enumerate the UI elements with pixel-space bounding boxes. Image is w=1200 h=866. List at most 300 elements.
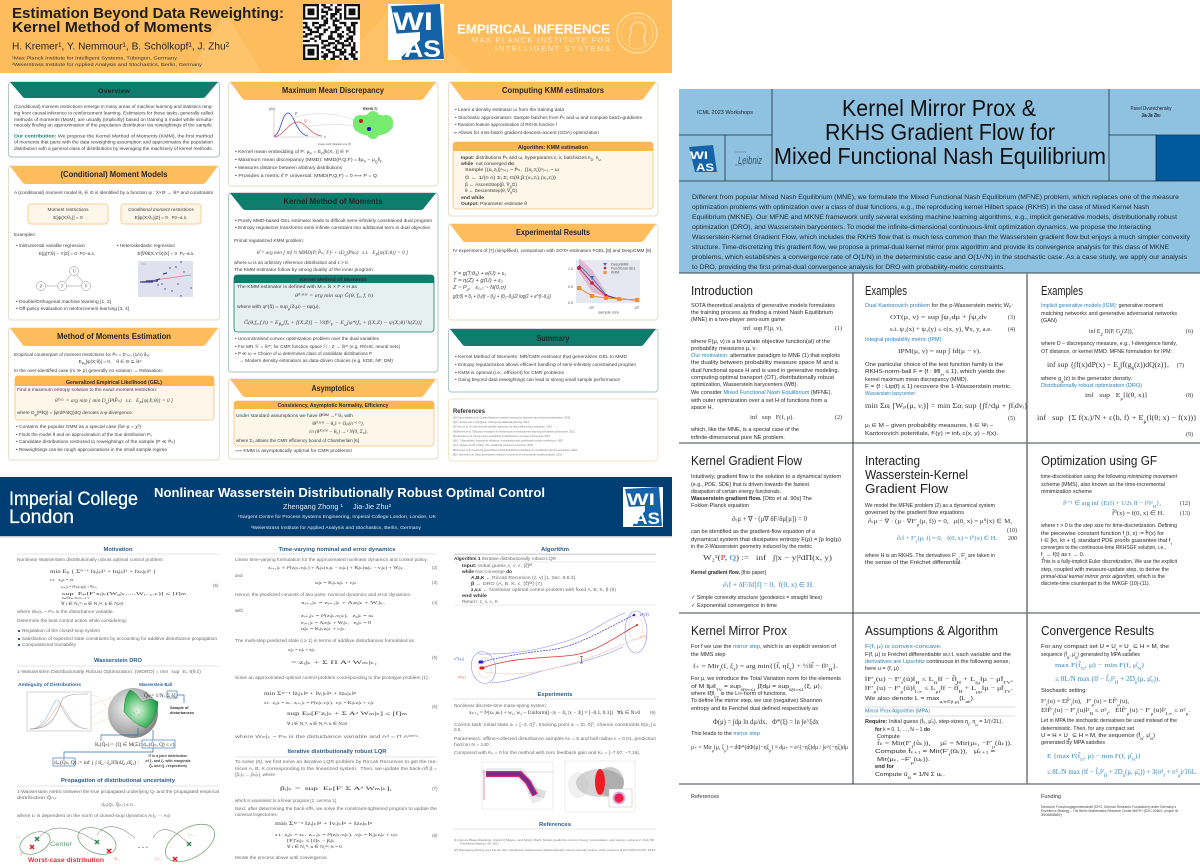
text and equations: (GAN) (1041, 318, 1057, 324)
chart: distributions to RKHS: P (294, 112, 298, 116)
heading: Method of Moments Estimation (57, 331, 171, 341)
bullet list: • Reweightings can be rough approximations in the small sample regime (16, 447, 167, 452)
text and equations: xᵢ₊₁|ₖ = zᵢ₊₁|ₖ + Aᵢeᵢ|ₖ + Wᵢ|ₖ, (301, 600, 385, 606)
callout: GEL (15, 376, 214, 420)
heading (865, 453, 968, 496)
text and equations: discrete-time counterpart to the IWKGF (10)-(11). (1041, 581, 1150, 587)
callout: GEL: θ̂ᴳᴱᴸ = arg min [ min Dφ(P‖P̂ₙ) s.t. EP[ψ(X;θ)] = 0 ] (55, 397, 173, 405)
text and equations: Next, after determining the back-offs, we solve the constraint-tightened program to update the (235, 806, 438, 811)
text block: Empirical counterpart of moment restrictions for P̂ₙ = Σⁿᵢ₌₁ (1/n) δₓᵢ: (14, 351, 150, 357)
bullet list: • Kernel Method of Moments: MR/CMR estimator that generalizes GEL to MMD (455, 354, 628, 359)
equation: Wasserstein ball and distance: Q̂ₙ and Q, respectively (149, 763, 187, 768)
callout: algorithm: Algorithm: KMM estimation (518, 145, 588, 151)
panel: overview (8, 82, 220, 157)
text block: with outer optimization over a set H of functions from a (690, 398, 828, 404)
text and equations: (2) (432, 565, 438, 570)
text and equations: with (235, 608, 243, 613)
conclusion: ⟹ KMM is asymptotically optimal for CMR problems! (235, 448, 352, 453)
text and equations: We also denote L = max a,b∈{f,μ} {L ab}. (865, 696, 976, 704)
text and equations (691, 474, 841, 609)
section: references (454, 822, 656, 852)
heading: Computing KMM estimators (502, 85, 604, 95)
text and equations: where gθ(z) is the generator density. (1040, 376, 1132, 384)
heading: Optimization using GF (1041, 453, 1157, 468)
text and equations: where H is an RKHS. The derivatives F′μ, F′f are taken in (864, 553, 995, 560)
diagram: trajectory tube: z(T) (639, 634, 647, 639)
text and equations: μ₊ = Mirμ(μ, ξμ) = dΦ*(dΦ(μ)−ηξμ) ≡ dμ₊ = e^(−ηξ)dμ / ∫e^(−ηξ)dμ (691, 744, 849, 752)
text and equations: (6) (432, 704, 438, 709)
text and equations: This is a fully-implicit Euler discretization. We use the explicit (1041, 559, 1177, 565)
icon: Leibniz logo: Leibniz (738, 155, 762, 167)
text and equations: f̂⁰(x) = f(0, x) ∈ H. (1111, 509, 1164, 517)
algorithm listing: A,B,K ← Riccati Recursion (z, v) [1, Sec. 8.8.3] (471, 575, 575, 580)
algorithm listing: for k = 0, 1, …, N − 1 do (875, 727, 931, 733)
section: motivation (17, 547, 219, 647)
diagram: uncertainty ellipses (16, 817, 221, 866)
text block: space H. (691, 405, 714, 411)
icon: WIAS logo (689, 145, 717, 174)
text and equations: ∂ₜμ + ∇ · (μ∇ δF/δμ[μ]) = 0 (732, 515, 807, 523)
text and equations: ∂ₜμ − ∇ · (μ · ∇F′ μ(μ, f)) = 0, μ(0, x) = μ⁰(x) ∈ M, (868, 518, 1012, 526)
text and equations: ∀ i ∈ N₁ᴺ, n ∈ N₁ⁿˣ, k = 0. (287, 844, 343, 850)
text block: neously finding an approximation of the population distribution via reweightings of the sample. (14, 123, 213, 128)
equation: empirical distribution with callout: Q̂ₙ = 1/Nₛ Σ δξᵢ (144, 692, 177, 699)
callout: consistency: where Σ₀ attains the CMR efficiency bound of Chamberlain [6] (236, 438, 359, 443)
icon: QR code (303, 4, 360, 60)
equation 1: xᵢ₊₁|ₖ = fᵈ(xᵢ|ₖ,uᵢ|ₖ) + Wₖ₊ᵢ (61, 584, 97, 590)
text and equations: (6) (1186, 328, 1193, 335)
algorithm listing: f̃ₖ = Mir(F′ f(ûₖ)), μ̃ₖ = Mir(μₖ, −F′ μ(ûₖ)). (877, 738, 1013, 748)
panel: introduction (690, 283, 842, 441)
text and equations (235, 557, 438, 739)
text and equation: 0.5. (454, 727, 462, 732)
abstract: Wasserstein-Kernel Gradient Flow, which includes the RKHS flow that is much less common than the Wasserstein gradient flow but enjoys a much simpler convexity (692, 234, 1191, 241)
text and equations (865, 644, 1014, 704)
header panel (679, 89, 1200, 273)
algorithm listing: Return: z, v, c, K (462, 599, 498, 604)
text and equations: μᵢ ∈ M – given probability measures, fᵢ ∈ Ψᵢ – (865, 422, 994, 429)
title: Kernel Mirror Prox & (842, 95, 1036, 121)
line chart: estimator error vs sample size: Functional GEL (611, 266, 636, 270)
text and equations: For f we use the mirror step, which is an explicit version of (691, 644, 836, 650)
logo: Imperial College London (9, 489, 138, 528)
diagram: trajectory tube: x*(x₀) (453, 656, 465, 661)
bullet list (455, 354, 636, 382)
bullet list: Computational tractability (22, 642, 77, 647)
text and equations (1037, 303, 1197, 438)
text and equations: zᵢ₊₁|ₖ = fᵈ(zᵢ|ₖ,vᵢ|ₖ), z₀|ₖ = xₖ (301, 613, 374, 619)
callout: GEL: Generalized Empirical Likelihood (GEL) (66, 380, 162, 386)
bullet list (235, 336, 400, 363)
text and equations: min Σαᵢ [Wₚ(μ, νᵢ)] = min Σαᵢ sup {∫fᵢᶜdμ + ∫fᵢdνᵢ} (865, 402, 1028, 410)
bullet list: • Contains the popular GMM as a special case (for φ = χ²) (16, 424, 141, 429)
bullet list (453, 107, 643, 135)
equation 1: min Eₚ { Σᴺ⁻¹ ‖xᵢ|ₖ‖² + ‖uᵢ|ₖ‖² + ‖xₙ|ₖ‖² } (50, 569, 157, 575)
chart: state-space trajectories (565, 761, 635, 812)
panel: references (448, 399, 658, 461)
section: iterative distributionally robust LQR (235, 749, 438, 860)
text and equations: the MMS step (691, 652, 726, 658)
chart: causal graph (36, 266, 90, 290)
logo text: empirical inference: INTELLIGENT SYSTEMS (495, 44, 610, 53)
chart: regression scatter (138, 261, 193, 297)
reference list (454, 838, 656, 852)
text and equations (865, 303, 1028, 437)
text and equations: t ∈ [kτ, kτ + τ], standard PDE proofs guarantee that fτ (1041, 537, 1172, 546)
text and equation: Nonlinear discrete-time mass-spring system: (454, 703, 547, 708)
equation: Wasserstein ball and distance (53, 728, 191, 768)
abstract: structure. Time-discretizing this gradient flow, we propose a primal-dual kernel mirror prox algorithm and provide its convergence analysis for this class of MKNE (692, 244, 1170, 251)
poster 2: nonlinear Wasserstein DRO control (0, 477, 672, 866)
reference list: [6] G. Chamberlain. Asymptotic efficiency in estimation with conditional moment restrictions. 1987 (453, 439, 563, 443)
heading: Introduction (691, 283, 753, 298)
text and equations: which is equivalent to a linear program [2, Lemma 1]. (235, 798, 337, 803)
text and equations: dynamical system that dissipates entropy F(ρ) = ∫ρ log(ρ) (691, 537, 841, 543)
chart: distributions to RKHS: RKHS ℋ (363, 106, 378, 111)
text and equations: Intuitively, gradient flow is the solution to a dynamical system (691, 474, 841, 480)
equation: Wasserstein ball and distance: of ξ₁ and ξ₂ with marginals (145, 759, 191, 763)
panel: computing KMM estimators (448, 82, 658, 216)
text block: where F(μ, ν) is a bi-variate objective function(al) of the (690, 339, 830, 345)
text and equations: generated by MPA satisfies (1041, 740, 1105, 746)
text and equations: (9) (1186, 431, 1193, 438)
text and equations: Kernel gradient flow. [this paper] (691, 570, 766, 576)
text and equations: inf sup {∫f(x)dP(x) − E z∫f(gθ(z))dQ(z)}, (1047, 361, 1169, 372)
callout: KMM definition: Ĝ(θ,f₀,f,h) = E P̂n[f₀ + f(X,Z)] − ½‖f‖² F − Eω[φ*(f₀ + f(X,Z) − ψ(X;θ)ᵀh(Z))] (244, 318, 422, 327)
text block: Our motivation: alternative paradigm to MNE (1) that exploits (691, 353, 840, 359)
diagram: uncertainty ellipses: Qₜ₊₁ (155, 857, 163, 861)
text and equation: xₖ₊₁ = fᵈ(xₖ,uₖ) + w₁, w₂ ~ Uniform([−|x − 3|, |x − 3|] × [−0.1, 0.1]) ∀k ∈ N≥0 (469, 710, 641, 716)
panel: maximum mean discrepancy (228, 82, 438, 186)
abstract: problems, which establishes a convergence rate of O(1/N) in the deterministic case and O(1/√N) in the stochastic case. As a case study, we apply our analysis (692, 253, 1188, 261)
text and equations: ≤ 8L/N max (‖f − f̂₀‖²H + 2Dh(μ, μ̂₀)) + 3(σ²f + σ²μ)/16L. (1047, 768, 1197, 778)
sub headings: Ambiguity of Distributions (18, 682, 81, 688)
text and equations: inf sup {Σ f(xᵢ)/N + ε⟨h, f⟩ + E μ(l(θ; x) − f(x))} (1037, 414, 1197, 424)
algorithm listing: while Not Converge do (461, 569, 512, 574)
text and equations: the sense of the Fréchet differential. (865, 560, 962, 566)
callout: KMM definition (234, 275, 434, 332)
text and equations: in the 2-Wasserstein geometry induced by the metric (691, 544, 812, 550)
panel: interacting Wasserstein-Kernel gradient flow (864, 453, 1017, 566)
text and equations: (3) (432, 580, 438, 585)
text and equations: Φ(μ) = ∫dμ ln dμ/dx, Φ*(ξ) = ln ∫e^ξdx (713, 718, 819, 726)
text and equations: ∀ i ∈ N₁ᴺ, n ∈ N₁ⁿˣ, k ∈ N≥0 (287, 721, 348, 727)
text and equations: nominal trajectories: (235, 812, 278, 817)
text and equations: trices A, B, K corresponding to the linearized system. Then, we update the back-off β = (235, 766, 437, 771)
equation: Wasserstein ball and distance: Bₑ(Q̂ₙ) = {Q ∈ M(Ξ): dᵥᵥ(Q̂ₙ, Q) ≤ ε} (95, 742, 175, 748)
text and equations: ✓ Exponential convergence in time (691, 603, 777, 609)
text and equations: This leads to the mirror step (691, 731, 760, 737)
text and equations: Distributionally robust optimization (DRO) (1041, 383, 1142, 389)
text block: inf sup F(f, μ). (750, 414, 794, 421)
affiliations: ²Weierstrass Institute for Applied Analysis and Stochastics, Berlin, Germany (12, 62, 203, 67)
title: Kernel Method of Moments (12, 20, 212, 36)
text block: inf sup F(μ, ν), (743, 325, 783, 332)
text block: the duality between probability measure space M and a (691, 360, 839, 366)
panel: conditional moment models (8, 166, 220, 320)
diagram: uncertainty ellipses: ... (138, 843, 150, 850)
panel: kernel mirror prox (690, 623, 849, 752)
text and equations: min Σᴺ⁻¹ ‖zᵢ|ₖ‖² + ‖vᵢ|ₖ‖² + ‖zₙ|ₖ‖² (275, 821, 373, 827)
callout: consistency: ‖θ̂ᴷᴹᴹ − θ₀‖ = Oₚ(n⁻¹ᐟ²), (312, 420, 364, 427)
text and equations: F(f, μ) is Fréchet differentiable w.r.t. each variable and the (865, 652, 1011, 658)
text block: We consider Mixed Functional Nash Equilibrium (MFNE), (691, 390, 832, 396)
bullet list: • For MR ℋ = ℝᵐ; for CMR function space ℋ : Z → ℝᵐ (e.g. RKHS, neural nets) (235, 344, 400, 349)
text and equation: Compared with Kₖ = 0 for the method with zero feedback gain and Kₖ = [−7.97, −7.16]. (454, 750, 640, 755)
text and equations: To solve (6), we first solve an iterative LQR problem by Riccati Recursion to get the ma- (235, 759, 438, 764)
equations: T = η(Z) + g(U) + ε₂ (453, 278, 503, 284)
diagram: uncertainty ellipses: Worst-case distribution (28, 857, 104, 864)
text block: E P̂n[ψ(X;θ)] = 0, θ ∈ Θ ⊆ ℝᵖ (79, 359, 142, 366)
text and equations: = zᵢ|ₖ + Σ Π Aᵈ Wₘ|ₖ, (291, 660, 377, 666)
text block: Nonlinear Wasserstein distributionally robust optimal control problem: (17, 557, 164, 562)
text block: distribution with a general class of distributions by leveraging the machinery of kernel methods. (14, 146, 213, 151)
algorithm listing: β ← DRO (A, B, K, ε, {ξ̂}ᴹ) (7) (471, 581, 543, 586)
text and equations: One particular choice of the test function family is the (865, 362, 1003, 368)
text and equations: Stochastic setting: (1041, 688, 1087, 694)
callout: moment restrictions (28, 204, 108, 224)
abstract: Different from popular Mixed Nash Equilibrium (MNE), we formulate the Mixed Functional Nash Equilibrium (MFNE) problem, which replaces one of the measure (692, 194, 1179, 201)
panel: experimental results (448, 224, 658, 320)
chart: distributions to RKHS (268, 106, 393, 146)
text and equations: IPM(μ, ν) = sup ∫ fd(μ − ν). (898, 348, 981, 355)
reference list: [8] Kremer et al. Functional generalized empirical likelihood estimation for conditional moment restrictions. 2022 (453, 448, 577, 452)
text and equations: scheme (MMS), also known as the time-incremental (1041, 482, 1165, 488)
authors and affiliations: Zhengang Zhong ¹ Jia-Jie Zhu² (283, 502, 391, 511)
panel: kernel gradient flow (691, 453, 841, 609)
text and equations: matching networks and generative adversarial networks (1041, 311, 1177, 317)
heading: Asymptotics (312, 383, 355, 393)
text and equations: W₂²( P, Q) := inf ∫|x − y|²dΠ(x, y) (703, 554, 833, 562)
chart: causal graph: T (61, 284, 64, 288)
text and equations: dissipation of certain energy functionals. (691, 489, 781, 495)
chart: ambiguity distributions (27, 692, 122, 731)
title: Estimation Beyond Data Reweighting: (12, 6, 284, 22)
footer: references heading: References (691, 794, 719, 800)
callout: algorithm: end while (461, 195, 484, 200)
text and equations: of M ‖μ‖ TV = sup ‖ξ‖∞≤1 ∫ξdμ = sup ‖ξ‖∞≤1 ⟨ξ, μ⟩, (691, 683, 823, 692)
text and equations: can be identified as the gradient-flow equation of a (691, 529, 816, 535)
text and equations: (13) (1180, 510, 1190, 517)
icon: WIAS logo: WI (393, 8, 433, 36)
poster 1: kernel method of moments (0, 0, 672, 461)
line chart: estimator error vs sample size (568, 258, 640, 314)
text and equation: (9) (650, 710, 656, 715)
text and equations: ✓ Simple convexity structure (geodesics = straight lines) (691, 595, 822, 601)
heading: Kernel Mirror Prox (691, 623, 787, 638)
authors: Jia-Jie Zhu (1142, 113, 1160, 119)
text block (690, 303, 842, 441)
text block: In the over-identified case (m ≫ p) generally no solution → Relaxation: (14, 368, 163, 373)
heading: Assumptions & Algorithm (865, 623, 998, 638)
algorithm listing: end while (462, 593, 488, 598)
text block: probability measures μ, ν. (691, 346, 757, 352)
text and equations: where D – discrepancy measure, e.g., f-divergence family, (1040, 341, 1177, 347)
text and equations: converges to the continuous-time RKHSGF solution, i.e., (1041, 545, 1166, 551)
text and equations: (5) (432, 655, 438, 660)
text block: IV experiment of [7] (simplified), comparison with SOTA estimators FGEL [8] and DeepGMM [9] (453, 248, 651, 253)
bullet list: • Candidate distributions restricted to reweightings of the sample (P ≪ P̂ₙ) (16, 438, 175, 444)
text and equations: fτ → f(t) as τ → 0. (1041, 552, 1085, 560)
title: RKHS Gradient Flow for (825, 119, 1055, 145)
text block: distribution Q̂ₙ,ₜ (17, 794, 58, 800)
authors and affiliations: ²Weierstrass Institute for Applied Analysis and Stochastics, Berlin, Germany (251, 525, 422, 530)
text and equations: (5) (1008, 415, 1015, 422)
bullet list: • Random feature approximation of RKHS function f (455, 122, 558, 127)
line chart: estimator error vs sample size: 0.5 (568, 285, 573, 289)
algorithm listing: Require: Initial guess (f̂₀, μ̂₀), step-sizes ηf, ημ = 1/(√2L). (865, 718, 1003, 726)
text and equations (690, 644, 849, 752)
text block: which, like the MNE, is a special case of the (690, 427, 799, 433)
logo text: empirical inference (457, 22, 611, 53)
text and equations: Integral probability metric (IPM): (865, 337, 943, 343)
text and equations: primal-dual kernel mirror prox algorithm, which is the (1040, 574, 1165, 580)
text and equations: βᵢ|ₖ = sup Eₚ[F′ Σ Aᵈ Wₘ|ₖ], (280, 786, 392, 792)
diagram: uncertainty ellipses: Center (50, 841, 73, 848)
line chart: estimator error vs sample size: 0.0 (568, 301, 573, 305)
bullet list (16, 424, 175, 452)
text and equations: uᵢ|ₖ = Kᵢ|ₖxᵢ|ₖ + cᵢ|ₖ. (315, 580, 358, 585)
bullet list: • Double/Orthogonal machine learning [1, 2] (16, 299, 111, 304)
text block: where εₜ is dependent on the norm of closed-loop dynamics Aₜ|₀ ··· Aₜ|ₜ (17, 813, 172, 818)
text and equations: F(f, μ) is convex-concave. (865, 644, 943, 650)
reference list: [2] D. Foster and V. Syrgkanis. Orthogonal statistical learning. 2019 (453, 420, 529, 424)
icon: WIAS logo: AS (634, 509, 660, 528)
text block (17, 609, 127, 623)
text and equations: step, coupled with measure-update step, to derive the (1041, 567, 1169, 573)
text block: • Purely MMD-based GEL estimator leads to difficult semi-infinitely constrained dual program (235, 218, 432, 223)
bullet list: Satisfaction of expected state constraints by accounting for additive disturbance propagation (22, 636, 218, 641)
text block: The KMM estimator follow by strong duality of the inner program: (234, 267, 374, 272)
text and equations: E {max F(f̂ N, μ) − min F(f, μ̂ N)} (1047, 752, 1141, 762)
heading: Examples (1041, 283, 1083, 298)
footer: funding: Funding (1041, 794, 1061, 800)
diagram: uncertainty ellipses: Qₙ,ₜ₊₁ (188, 833, 198, 838)
panel: kernel method of moments (228, 193, 438, 372)
equations: g(t;θ) = θ₁ + θ₂t(t − θ₁) + (θ₁−θ₂)/2 log(1 + e^(t−θ₂)) (453, 294, 551, 300)
diagram: uncertainty ellipses: Qₙ,₁ (16, 835, 23, 840)
reference list: [4] Bennett et al. Off-policy evaluation in infinite-horizon reinforcement learning with latent confounders. 2021 (453, 429, 575, 433)
text and equations: Let in MPA the stochastic derivatives be used instead of the (1041, 718, 1177, 724)
text and equations: ∂ₜf + δF/δf[f] = 0, f(0, x) ∈ H. (723, 581, 814, 589)
heading: Convergence Results (1041, 623, 1154, 638)
text and equations: For any compact set U = U f × U μ ⊆ H × M, the (1041, 644, 1169, 652)
text and equations: Solve an approximated optimal control problem corresponding to the prototype problem (1): (235, 675, 429, 680)
authors (1130, 106, 1172, 119)
text block: infinite-dimensional pure NE problem. (691, 435, 785, 441)
text and equations: Fokker-Planck equation (691, 503, 749, 509)
callout: algorithm: Sample {(xᵢ,zᵢ)}ⁿᵢ₌₁ ~ P̂ₙ, {(xⱼ,zⱼ)}ⁿⱼ₌₁ ~ ω (465, 166, 559, 172)
title (12, 6, 284, 36)
equation 1: ∀ i ∈ N₁ᴺ, n ∈ N₁ⁿˣ, k ∈ N≥0 (61, 601, 124, 607)
callout: algorithm: Input: distributions P̂ₙ and ω, hyperparams ε, λ, batchsizes n D, n ω (461, 154, 601, 162)
title (774, 95, 1106, 169)
text and equations: entropy and its Fenchel dual defined respectively as (691, 706, 818, 712)
heading: Interacting (865, 453, 920, 468)
bullet list (18, 628, 218, 647)
algorithm listing: Input: Initial guess z, v, ε, {ξ̂}ᴹ (462, 563, 533, 568)
text and equations: (4) (432, 600, 438, 605)
panel: assumptions and algorithm (865, 623, 1015, 780)
callout: GEL: Find a maximum entropy solution to the exact moment restriction: (17, 387, 157, 392)
reference list: [9] A. Bennett et al. Deep generalized method of moments for instrumental variable analysis. 2019 (453, 452, 562, 456)
text and equations: and (235, 573, 243, 578)
chart: closed-loop trajectories (482, 762, 553, 809)
bullet list (16, 299, 129, 311)
text and equations (235, 759, 438, 860)
callout: consistency: Under standard assumptions we have θ̂ᴷᴹᴹ →ᴾ θ₀ with (236, 413, 353, 418)
text and equations: time-discretization using the following minimizing movement (1041, 474, 1177, 480)
algorithm listing: Compute (877, 734, 900, 740)
text and equations: ‖F′ μ(u) − F′ μ(ũ)‖ L∞ ≤ L μf‖f − f̃‖ H + L μμ‖μ − μ̃‖ TV . (865, 683, 1014, 694)
chart: causal graph: Z (40, 284, 43, 288)
title: Nonlinear Wasserstein Distributionally Robust Optimal Control (154, 485, 545, 500)
text and equations: here u = (f, μ) (865, 666, 899, 672)
text block: 1-Wasserstein Distributionally Robust Optimization: (WDRO) = min sup Eₚ ℓ(θ,ξ) (17, 669, 202, 674)
text and equations: where Wₘ|ₖ ~ Pₘ is the disturbance variable and Aᵈ = Π Aᵈᵐⁱⁿ. (235, 733, 420, 739)
chart: causal graph: U (73, 268, 77, 274)
text and equations (1040, 474, 1190, 587)
text block: where ω is an arbitrary reference distribution and ε > 0. (234, 260, 349, 265)
line chart: estimator error vs sample size: sample size (598, 310, 620, 314)
heading: Experimental Results (516, 227, 590, 237)
text and equations: deterministic. Then, for any compact set (1041, 726, 1134, 732)
heading: (Conditional) Moment Models (60, 169, 168, 179)
line chart: estimator error vs sample size: KMM (611, 270, 619, 274)
algorithm listing: Algorithm 1 Iterative distributionally robust LQR (454, 556, 557, 561)
text and equations: U = H × U μ ⊆ H × M, the sequence (f̂ N, μ̂N) (1041, 732, 1155, 740)
text and equations: (10) (1007, 527, 1017, 534)
diagram: uncertainty ellipses: M₁,₁ (113, 857, 121, 862)
text and equations: We model the MFNE problem (2) as a dynamical system (865, 503, 995, 509)
authors and affiliations: ¹Sargent Centre for Process Systems Engineering, Imperial College London, London, UK (238, 514, 436, 519)
text and equations: governed by the gradient flow equations (865, 510, 964, 516)
algorithm listing: end for (875, 764, 895, 770)
diagram: trajectory tube: z*(T) (639, 612, 649, 617)
callout: KMM definition: θ̂ᴷᴹᴹ = arg min sup Ĝ(θ, f₀, f, h) (295, 291, 373, 299)
callout: algorithm: θ ← DescentStep(θ, ∇ θĜ) (465, 187, 517, 195)
text block: optimization, Wasserstein barycenters (WB). (691, 382, 798, 388)
text and equations: [F]′zᵢ|ₖ ≤ [f]ₙ − βᵢ|ₖ (287, 838, 335, 843)
text block: examples: Examples: (14, 232, 36, 237)
bullet list: • Stochastic approximation: Sample batches from P̂ₙ and ω and compute batch-gradients (455, 114, 643, 120)
heading: Motivation (104, 547, 133, 553)
callout: consistency (234, 401, 434, 446)
text and equations: xᵢ|ₖ = zᵢ|ₖ + eᵢ|ₖ (288, 647, 315, 652)
text and equations: inf sup E μ[l(θ, x)] (1085, 392, 1147, 400)
text and equations: The multi-step predicted state (i ≥ 1) in terms of additive disturbances formulated as (235, 638, 415, 643)
text and equations (864, 503, 1017, 566)
equation 1: (5) (213, 583, 219, 588)
callout: consistency: √n (θ̂ᴷᴹᴹ − θ₀) →ᵈ N(0, Σ₀), (308, 428, 368, 435)
bullet list: • KMM is optimal (i.e., efficient) for CMR problems (455, 370, 565, 375)
equation: empirical distribution with callout (144, 691, 194, 715)
text and equations: (4) (1008, 326, 1015, 333)
equation 1: s.t. x₀|ₖ = xₖ (50, 577, 74, 582)
text block: (MNE) in a two-player zero-sum game (691, 317, 785, 323)
text and equations: (12) (1180, 500, 1190, 507)
icon: WIAS logo: WI (627, 490, 655, 509)
text and equations: kernel maximum mean discrepancy (MMD). (865, 377, 968, 383)
footer: funding (1041, 794, 1179, 817)
text and equations: OT(μ, ν) = sup ∫ψ₁dμ + ∫ψ₂dν (890, 314, 987, 321)
abstract: to DRO, providing the first primal-dual convergence analysis for DRO with probability-metric constraints. (692, 264, 1005, 271)
equation: Wasserstein ball and distance: Π is a joint distribution (149, 754, 187, 758)
heading: Algorithm (541, 547, 569, 553)
text and equations: eᵢ₊₁|ₖ = Aᵢeᵢ|ₖ + Wᵢ|ₖ, e₀|ₖ = 0 (301, 620, 372, 626)
panel: asymptotics (228, 379, 438, 459)
text block: Determine the best control action while considering: (17, 618, 127, 623)
